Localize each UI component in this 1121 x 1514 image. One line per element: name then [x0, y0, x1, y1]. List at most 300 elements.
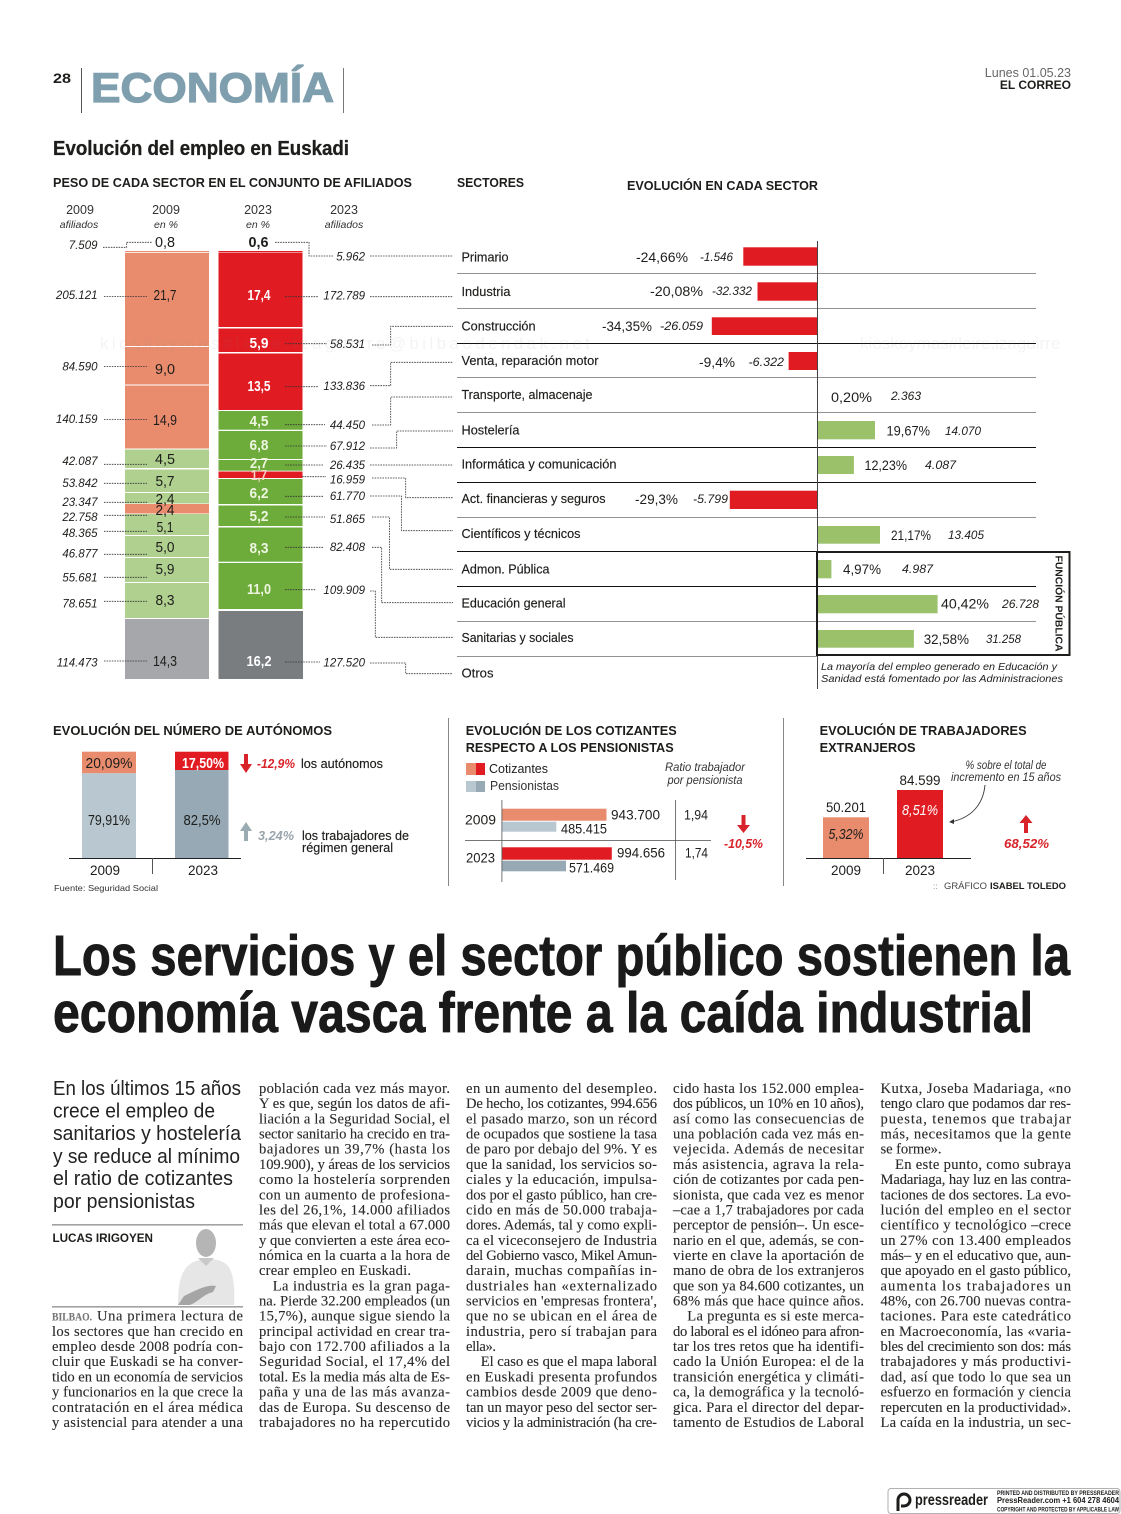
- article column 3: tan un mayor peso del sector ser-: [466, 1400, 657, 1416]
- arrow down: ratio: [737, 815, 750, 833]
- arrow up: régimen general: [240, 822, 252, 841]
- article column 2: paña y una de las más avanza-: [259, 1385, 450, 1401]
- article column 2: total. Es la media más alta de Es-: [259, 1369, 450, 1385]
- autónomos bars: 79,91%: [88, 813, 130, 829]
- article column 3: que no se ubican en el área de: [466, 1309, 657, 1325]
- subheading: el ratio de cotizantes: [53, 1167, 233, 1190]
- watermark: kioskoymas#leire.izaguirre: [860, 334, 1060, 353]
- arrow down: autónomos: [240, 754, 252, 773]
- cotizantes bar chart: 1,74: [685, 846, 708, 860]
- article column 2: liación a la Seguridad Social, el: [259, 1111, 450, 1127]
- article column 2: con un aumento de profesiona-: [259, 1187, 450, 1203]
- cotizantes bar chart: 485.415: [561, 822, 607, 836]
- graphic credit: [933, 881, 1066, 892]
- affiliates 2023 numbers: 67.912: [330, 441, 366, 453]
- ratio heading: por pensionista: [667, 775, 742, 787]
- graphic credit: ISABEL TOLEDO: [990, 881, 1066, 892]
- affiliates 2023 numbers: 16.959: [330, 474, 366, 486]
- subheading: y se reduce al mínimo: [53, 1145, 240, 1168]
- section title: Economía: ECONOMÍA: [91, 64, 334, 111]
- régimen general variation: 3,24%: [258, 829, 294, 843]
- stacked bar 2009: 5,1: [156, 520, 174, 536]
- article column 2: trabajadores no ha repercutido: [259, 1415, 450, 1431]
- legend: Pensionistas: [490, 779, 559, 793]
- column headers: 2023: [244, 203, 272, 217]
- article column 4: gica. Para el director del depar-: [673, 1400, 864, 1416]
- note: percentage of total: incremento en 15 años: [951, 772, 1061, 784]
- article column 3: [466, 1081, 658, 1431]
- affiliates 2009 numbers: 84.590: [62, 362, 98, 374]
- article column 1: tido en un economía de servicios: [52, 1369, 243, 1385]
- article column 4: que son ya 84.600 cotizantes, un: [673, 1278, 865, 1294]
- article column 2: como la hostelería sorprenden: [259, 1172, 451, 1188]
- autónomos bars: 82,5%: [184, 813, 221, 829]
- pressreader wordmark: pressreader: [915, 1492, 988, 1509]
- affiliates 2023 numbers: 44.450: [330, 420, 366, 432]
- cotizantes bar chart: 2023: [466, 850, 495, 866]
- extranjeros variation: 68,52%: [1004, 837, 1049, 851]
- article column 3: industria, pero sí trabajan para: [466, 1324, 658, 1340]
- diverging bar chart: sector evolution: 31.258: [986, 634, 1022, 646]
- graphic credit: GRÁFICO: [944, 881, 987, 892]
- article column 2: La industria es la gran paga-: [273, 1278, 450, 1294]
- pressreader legal text: [997, 1491, 1120, 1514]
- sector labels: Transporte, almacenaje: [462, 388, 593, 402]
- affiliates 2009 numbers: 78.651: [62, 598, 98, 610]
- article column 4: ción de cotizantes por cada pen-: [673, 1172, 864, 1188]
- cotizantes bar chart: 571.469: [569, 860, 614, 876]
- función pública note: [821, 661, 1064, 685]
- article column 5: se forme».: [880, 1142, 942, 1158]
- sector labels: Construcción: [462, 320, 536, 334]
- función pública note: La mayoría del empleo generado en Educación y: [821, 661, 1058, 673]
- column headers: en %: [246, 219, 270, 231]
- cotizantes bar chart: [465, 800, 711, 882]
- article column 3: cido en más de 50.000 trabaja-: [466, 1202, 657, 1218]
- article column 5: trabajadores y más productivi-: [880, 1354, 1071, 1370]
- affiliates 2023 numbers: 172.789: [323, 290, 366, 302]
- sector labels: [462, 250, 617, 680]
- article column 2: das de Europa. Su descenso de: [259, 1400, 450, 1416]
- article column 2: y que convierten a este área eco-: [259, 1233, 450, 1249]
- stacked bar 2009: 14,9: [153, 413, 177, 429]
- article column 5: bles del crecimiento son dos: más: [880, 1339, 1071, 1355]
- ratio variation: -10,5%: [724, 837, 763, 851]
- article column 2: sector sanitario ha crecido en tra-: [259, 1126, 450, 1142]
- affiliates 2023 numbers: 51.865: [330, 514, 366, 526]
- diverging bar chart: sector evolution: -1.546: [700, 252, 734, 264]
- article column 2: nómica en la cuarta a la hora de: [259, 1248, 450, 1264]
- legend: [466, 762, 559, 793]
- affiliates 2023 numbers: 133.836: [323, 381, 366, 393]
- article column 3: de paro por debajo del 9%. Y es: [466, 1142, 657, 1158]
- extranjeros bar chart: 5,32%: [828, 827, 864, 843]
- diverging bar chart: sector evolution: -29,3%: [635, 492, 678, 507]
- stacked bar 2023: 0,6: [248, 235, 268, 251]
- autónomos variation: -12,9%: [257, 757, 295, 771]
- article column 2: bajadores un 39,7% (hasta los: [259, 1142, 450, 1158]
- extranjeros bar chart: 2009: [831, 863, 861, 878]
- article column 3: De hecho, los cotizantes, 994.656: [466, 1096, 657, 1112]
- diverging bar chart: sector evolution: 0,20%: [831, 390, 872, 405]
- article column 5: taciones. Para este catedrático: [880, 1309, 1071, 1325]
- article column 2: Y es que, según los datos de afi-: [259, 1096, 450, 1112]
- article column 4: una población cada vez más en-: [673, 1126, 864, 1142]
- extranjeros bar chart: 8,51%: [902, 803, 938, 819]
- stacked bar 2009: 9,0: [155, 362, 175, 378]
- article column 3: en Euskadi presenta profundos: [466, 1369, 657, 1385]
- article column 3: darain, muchas compañías in-: [466, 1263, 657, 1279]
- article column 5: más– y en el educativo que, aun-: [880, 1248, 1071, 1264]
- article column 5: 48%, con 26.700 nuevas contra-: [880, 1294, 1071, 1310]
- panel: cotizantes y pensionistas: [448, 718, 763, 886]
- stacked bar 2009: 21,7: [154, 288, 176, 304]
- article column 5: Madariaga, hay luz en las contra-: [880, 1172, 1071, 1188]
- stacked bar 2023: 6,8: [250, 438, 268, 454]
- article column 4: tar los tres retos que ha identifi-: [673, 1339, 864, 1355]
- article column 1: cluir que Euskadi se ha conver-: [52, 1354, 243, 1370]
- subheading: [53, 1077, 242, 1213]
- affiliates 2009 numbers: 53.842: [62, 478, 98, 490]
- column headers: 2023: [330, 203, 358, 217]
- stacked bar 2009: 8,3: [156, 593, 174, 609]
- autónomos bars: 17,50%: [182, 756, 224, 772]
- article column 2: [259, 1081, 451, 1431]
- sector evolution heading: EVOLUCIÓN EN CADA SECTOR: [627, 178, 819, 193]
- affiliates 2023 numbers: 127.520: [323, 658, 366, 670]
- article column 4: así como las consecuencias de: [673, 1111, 864, 1127]
- stacked bar 2009: 4,5: [155, 452, 175, 468]
- stacked bar 2009: 5,7: [156, 474, 174, 490]
- date and newspaper name: Lunes 01.05.23: [985, 66, 1071, 80]
- diverging bar chart: sector evolution: 2.363: [890, 391, 922, 403]
- article column 5: más, necesitamos que la gente: [880, 1126, 1071, 1142]
- extranjeros heading: EVOLUCIÓN DE TRABAJADORES: [820, 723, 1027, 738]
- note: percentage of total: % sobre el total de: [966, 760, 1046, 772]
- cotizantes heading: EVOLUCIÓN DE LOS COTIZANTES: [466, 723, 677, 738]
- affiliates 2009 numbers: 7.509: [69, 240, 98, 252]
- autónomos variation: los autónomos: [301, 757, 383, 771]
- article column 4: sionista, que cada vez es menor: [673, 1187, 864, 1203]
- affiliates 2009 numbers: 140.159: [56, 414, 98, 426]
- stacked bar 2023: 17,4: [248, 288, 270, 304]
- article column 5: puesta, tenemos que trabajar: [880, 1111, 1071, 1127]
- article column 4: transición energética y climáti-: [673, 1369, 864, 1385]
- affiliates 2009 numbers: 23.347: [61, 497, 98, 509]
- date and newspaper name: EL CORREO: [1000, 78, 1071, 92]
- diverging bar chart: sector evolution: 4.087: [925, 460, 957, 472]
- article column 4: nario en el que, además, se con-: [673, 1233, 864, 1249]
- sector labels: Primario: [462, 250, 509, 264]
- source: Fuente: Seguridad Social: [54, 883, 158, 893]
- autónomos bars: [69, 752, 241, 878]
- diverging bar chart: sector evolution: -24,66%: [636, 250, 688, 265]
- affiliates 2023 numbers: 82.408: [330, 542, 366, 554]
- article column 2: población cada vez más mayor.: [259, 1081, 450, 1097]
- stacked bar 2023: 16,2: [246, 654, 272, 670]
- article column 1: los sectores que han crecido en: [52, 1324, 244, 1340]
- stacked bar 2023: 1,7: [251, 468, 267, 484]
- diverging bar chart: sector evolution: 21,17%: [891, 528, 931, 543]
- autónomos bars: 2023: [188, 863, 218, 878]
- stacked bar 2009: 5,0: [156, 540, 174, 556]
- article column 5: científico y tecnológico –crece: [880, 1218, 1071, 1234]
- affiliates 2009 numbers: 114.473: [57, 658, 98, 670]
- note: percentage of total: [951, 760, 1061, 784]
- diverging bar chart: sector evolution: 12,23%: [864, 458, 907, 473]
- article column 2: Seguridad Social, el 17,4% del: [259, 1354, 450, 1370]
- diverging bar chart: sector evolution: 4,97%: [843, 562, 881, 577]
- affiliates 2023 numbers: 5.962: [336, 252, 366, 264]
- cotizantes heading: [466, 723, 677, 755]
- article column 5: un 27% con 13.400 empleados: [880, 1233, 1071, 1249]
- affiliates 2009 numbers: 46.877: [62, 548, 98, 560]
- stacked bar 2023: [218, 235, 303, 679]
- autónomos variation: [257, 757, 383, 771]
- sector labels: Otros: [462, 666, 494, 680]
- stacked bar 2023: 11,0: [247, 582, 271, 598]
- article column 3: servicios en 'empresas frontera',: [466, 1294, 657, 1310]
- watermark: [100, 334, 1060, 353]
- page number: 28: [53, 70, 71, 86]
- affiliates 2023 numbers: 61.770: [330, 491, 366, 503]
- affiliates 2009 numbers: [55, 240, 98, 670]
- headline: [53, 924, 1071, 1045]
- extranjeros bar chart: 50.201: [826, 800, 866, 815]
- article column 2: principal actividad en crear tra-: [259, 1324, 450, 1340]
- diverging bar chart: sector evolution: 19,67%: [886, 424, 930, 438]
- sector labels: Científicos y técnicos: [462, 527, 580, 541]
- extranjeros bar chart: 84.599: [900, 773, 940, 788]
- article column 5: en Macroeconomía, las «varia-: [880, 1324, 1071, 1340]
- column headers: [60, 203, 364, 231]
- sector labels: Industria: [462, 285, 511, 299]
- article column 5: tengo claro que podamos dar res-: [880, 1096, 1071, 1112]
- legend: Cotizantes: [489, 762, 548, 776]
- article column 3: ciales y la educación, impulsa-: [466, 1172, 657, 1188]
- article column 1: [52, 1309, 244, 1431]
- article column 1: Una primera lectura de: [97, 1309, 243, 1325]
- diverging bar chart: sector evolution: -9,4%: [699, 355, 735, 370]
- article column 4: vierte en clave la aportación de: [673, 1248, 864, 1264]
- byline: LUCAS IRIGOYEN: [52, 1233, 153, 1245]
- article column 1: empleo desde 2008 podría con-: [52, 1339, 243, 1355]
- affiliates 2009 numbers: 22.758: [61, 512, 98, 524]
- article column 3: dustriales han «externalizado: [466, 1278, 657, 1294]
- diverging bar chart: sector evolution: [602, 241, 1040, 689]
- affiliates 2009 numbers: 48.365: [62, 528, 98, 540]
- article column 1: y funcionarios en la que crece la: [52, 1385, 244, 1401]
- article column 5: aumenta los trabajadores un: [880, 1278, 1072, 1294]
- autónomos bars: 2009: [90, 863, 120, 878]
- article column 2: bajo con 172.700 afiliados a la: [259, 1339, 451, 1355]
- column headers: en %: [154, 219, 178, 231]
- stacked bar 2023: 4,5: [250, 414, 268, 430]
- article column 5: taciones de dos sectores. La evo-: [880, 1187, 1071, 1203]
- sectors heading: SECTORES: [457, 175, 524, 190]
- article column 3: del Gobierno vasco, Mikel Amun-: [466, 1248, 657, 1264]
- stacked bar 2009: 5,9: [156, 562, 174, 578]
- article column 2: 109.900), y áreas de los servicios: [259, 1157, 450, 1173]
- affiliates 2023 numbers: [323, 252, 366, 670]
- stacked bar 2023: 8,3: [250, 541, 268, 557]
- icon: pressreader logo: [898, 1494, 910, 1511]
- portrait of the author: [178, 1229, 234, 1305]
- diverging bar chart: sector evolution: 13.405: [948, 530, 985, 542]
- article column 5: dad, así que todo lo que sea un: [880, 1369, 1072, 1385]
- subheading: por pensionistas: [53, 1190, 195, 1213]
- función pública box: [817, 552, 1070, 655]
- article column 3: en un aumento del desempleo.: [466, 1081, 657, 1097]
- article column 4: cido hasta los 152.000 emplea-: [673, 1081, 864, 1097]
- stacked bar 2009: 2,4: [156, 503, 174, 519]
- article column 4: dos públicos, un 10% en 10 años),: [673, 1096, 864, 1112]
- article column 2: 15,7%), aunque sigue siendo la: [259, 1309, 451, 1325]
- stacked bar 2009: 14,3: [153, 654, 177, 670]
- cotizantes bar chart: 1,94: [684, 808, 708, 822]
- article column 2: más que elevan el total a 67.000: [259, 1218, 450, 1234]
- diverging bar chart: sector evolution: -20,08%: [650, 284, 703, 299]
- article column 1: BILBAO.: [52, 1310, 92, 1324]
- diverging bar chart: sector evolution: 4.987: [902, 564, 934, 576]
- subheading: sanitarios y hostelería: [53, 1122, 242, 1145]
- diverging bar chart: sector evolution: -5.799: [693, 494, 729, 506]
- article column 2: na. Pierde 32.200 empleados (un: [259, 1294, 451, 1310]
- extranjeros bar chart: [806, 773, 971, 878]
- article column 5: esfuerzo en formación y ciencia: [880, 1385, 1072, 1401]
- article column 5: [880, 1081, 1072, 1431]
- article column 4: tamento de Estudios de Laboral: [673, 1415, 864, 1431]
- cotizantes heading: RESPECTO A LOS PENSIONISTAS: [466, 740, 674, 755]
- régimen general variation: régimen general: [302, 841, 393, 855]
- article column 2: les del 26,1%, 14.000 afiliados: [259, 1202, 450, 1218]
- dotted leader lines: [103, 242, 453, 674]
- cotizantes bar chart: 994.656: [617, 846, 665, 860]
- cotizantes bar chart: 943.700: [611, 808, 660, 822]
- affiliates 2009 numbers: 205.121: [55, 290, 98, 302]
- ratio heading: [665, 762, 746, 787]
- graphic credit: ::: [933, 881, 938, 891]
- article column 5: repercuten en la productividad».: [880, 1400, 1071, 1416]
- affiliates 2009 numbers: 55.681: [62, 572, 98, 584]
- stacked bar 2023: 5,9: [250, 336, 268, 352]
- arrow up: extranjeros: [1020, 815, 1032, 833]
- column headers: afiliados: [60, 219, 99, 231]
- article column 4: perceptor de pensión–. Un esce-: [673, 1218, 864, 1234]
- diverging bar chart: sector evolution: -32.332: [712, 286, 753, 298]
- stacked bar 2009: [125, 235, 209, 679]
- article column 4: 68% más que hace quince años.: [673, 1294, 864, 1310]
- sector labels: Venta, reparación motor: [462, 354, 598, 368]
- article column 4: do laboral es el idóneo para afron-: [673, 1324, 864, 1340]
- article column 4: La pregunta es si este merca-: [687, 1309, 864, 1325]
- affiliates 2023 numbers: 109.909: [323, 585, 366, 597]
- pressreader badge: [888, 1488, 1120, 1514]
- watermark: kioskoymas#leire.izaguirre@bilbaodendak.net: [100, 334, 590, 353]
- article column 4: mano de obra de los extranjeros: [673, 1263, 864, 1279]
- affiliates 2023 numbers: 58.531: [330, 339, 365, 351]
- article column 5: En este punto, como subraya: [895, 1157, 1072, 1173]
- extranjeros bar chart: 2023: [905, 863, 935, 878]
- article column 5: lución del empleo en el sector: [880, 1202, 1071, 1218]
- función pública box: FUNCIÓN PÚBLICA: [1052, 556, 1066, 652]
- article column 3: dores. Además, tal y como expli-: [466, 1218, 657, 1234]
- article column 4: más asistencia, agrava la rela-: [673, 1157, 864, 1173]
- article column 5: que apoyado en el gasto público,: [880, 1263, 1071, 1279]
- column headers: 2009: [66, 203, 94, 217]
- column headers: afiliados: [325, 219, 364, 231]
- stacked bar 2023: 5,2: [250, 509, 268, 525]
- stacked bar 2023: 2,7: [250, 456, 268, 472]
- función pública note: Sanidad está fomentado por las Administraciones: [821, 673, 1064, 685]
- régimen general variation: [258, 829, 409, 855]
- extranjeros heading: EXTRANJEROS: [820, 740, 916, 755]
- diverging bar chart: sector evolution: -26.059: [660, 321, 704, 333]
- affiliates 2023 numbers: 26.435: [329, 460, 366, 472]
- column headers: 2009: [152, 203, 180, 217]
- régimen general variation: los trabajadores de: [302, 829, 409, 843]
- article column 5: La caída en la industria, un sec-: [880, 1415, 1071, 1431]
- curved arrow to 8,51%: [949, 785, 985, 824]
- article column 3: de ocupados que sostiene la tasa: [466, 1126, 658, 1142]
- autónomos heading: EVOLUCIÓN DEL NÚMERO DE AUTÓNOMOS: [53, 723, 332, 738]
- diverging bar chart: sector evolution: 14.070: [945, 426, 982, 438]
- sector labels: Hostelería: [462, 424, 520, 438]
- stacked bars heading: PESO DE CADA SECTOR EN EL CONJUNTO DE AFILIADOS: [53, 175, 412, 190]
- diverging bar chart: sector evolution: 26.728: [1001, 599, 1040, 611]
- stacked bar 2009: 2,4: [156, 492, 174, 508]
- sector labels: Act. financieras y seguros: [462, 492, 606, 506]
- article column 3: vicios y la administración (ha cre-: [466, 1415, 657, 1431]
- diverging bar chart: sector evolution: 32,58%: [924, 632, 969, 647]
- affiliates 2009 numbers: 42.087: [62, 456, 98, 468]
- date and newspaper name: [985, 66, 1071, 92]
- extranjeros heading: [820, 723, 1027, 755]
- diverging bar chart: sector evolution: -6.322: [748, 357, 785, 369]
- stacked bar 2009: 0,8: [155, 235, 175, 251]
- article column 4: cado la Unión Europea: el de la: [673, 1354, 865, 1370]
- diverging bar chart: sector evolution: 40,42%: [941, 596, 989, 612]
- cotizantes bar chart: 2009: [465, 812, 496, 828]
- article column 4: [672, 1081, 865, 1431]
- article column 3: El caso es que el mapa laboral: [481, 1354, 657, 1370]
- panel: autónomos: [53, 723, 409, 893]
- diverging bar chart: sector evolution: -34,35%: [602, 319, 652, 334]
- autónomos bars: 20,09%: [86, 756, 133, 772]
- stacked bar 2023: 13,5: [248, 379, 270, 395]
- subheading: En los últimos 15 años: [53, 1077, 241, 1100]
- stacked bar 2023: 6,2: [250, 486, 268, 502]
- panel: trabajadores extranjeros: [783, 718, 1066, 892]
- ratio heading: Ratio trabajador: [665, 762, 746, 774]
- article column 3: dos por el gasto público, han cre-: [466, 1187, 657, 1203]
- article column 4: ca, la demográfica y la tecnoló-: [673, 1385, 864, 1401]
- article column 1: contratación en el área médica: [52, 1400, 244, 1416]
- article column 2: crear empleo en Euskadi.: [259, 1263, 411, 1279]
- subheading: crece el empleo de: [53, 1100, 215, 1123]
- article column 1: y asistencial para atender a una: [52, 1415, 244, 1431]
- article column 3: ella».: [466, 1339, 496, 1355]
- article column 4: –cae a 1,7 trabajadores por cada: [672, 1202, 865, 1218]
- sector row rules: [457, 273, 1036, 657]
- sector labels: Sanitarias y sociales: [462, 631, 574, 645]
- sector labels: Admon. Pública: [462, 562, 550, 576]
- article column 5: Kutxa, Joseba Madariaga, «no: [880, 1081, 1071, 1097]
- article column 3: ca el viceconsejero de Industria: [466, 1233, 658, 1249]
- article column 3: cambios desde 2009 que deno-: [466, 1385, 657, 1401]
- article column 3: que la sanidad, los servicios so-: [466, 1157, 657, 1173]
- sector labels: Informática y comunicación: [462, 458, 617, 472]
